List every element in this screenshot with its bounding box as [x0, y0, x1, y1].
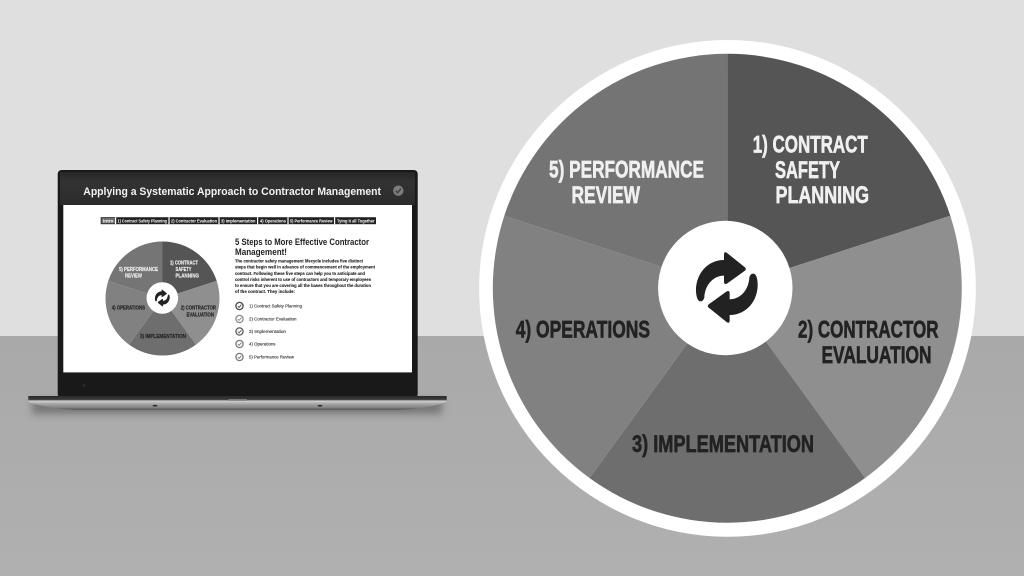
slide paragraph: of the contract. They include: [235, 289, 295, 295]
slide title bar [60, 172, 415, 205]
mini segment 5 [108, 242, 162, 298]
slide heading: Management! [235, 247, 287, 257]
mini segment 2 [162, 281, 219, 345]
laptop shadow [32, 400, 442, 414]
navigation tabs: Intro [103, 218, 114, 223]
mini segment 1 [162, 242, 217, 298]
laptop base [28, 396, 447, 410]
navigation tabs: 1) Contract Safety Planning [118, 218, 167, 223]
background wall [0, 0, 1024, 337]
label 5: 5) PERFORMANCE [549, 157, 704, 184]
slide title: Applying a Systematic Approach to Contractor Management [83, 186, 381, 198]
slide heading: 5 Steps to More Effective Contractor [235, 237, 369, 247]
mini label 2: EVALUATION [186, 312, 214, 318]
label 1: PLANNING [776, 182, 869, 209]
slide paragraph: The contractor safety management lifecycle includes five distinct [235, 258, 363, 264]
label 5: REVIEW [572, 182, 640, 209]
navigation tabs: 5) Performance Review [290, 218, 333, 223]
laptop camera [83, 384, 85, 387]
mini label 1: 1) CONTRACT [170, 260, 198, 266]
slide paragraph: contract. Following these five steps can help you to anticipate and [235, 271, 365, 277]
navigation tabs: 4) Operations [260, 218, 287, 223]
label 2: 2) CONTRACTOR [798, 317, 938, 344]
mini wheel chart [106, 242, 219, 355]
navigation tabs: Tying it all Together [337, 218, 375, 223]
mini label 5: 5) PERFORMANCE [119, 267, 158, 273]
icon: check badge [393, 186, 403, 196]
segment 3: implementation [590, 288, 865, 523]
list item 5: 5) Performance Review [249, 355, 294, 361]
segment 1: contract safety planning [727, 54, 950, 288]
icon: refresh arrows [696, 252, 758, 323]
main wheel chart [479, 40, 976, 537]
segment 5: performance review [504, 54, 727, 288]
slide paragraph: to ensure that you are covering all the bases throughout the duration [235, 283, 371, 289]
slide paragraph: steps that begin well in advance of commencement of the employment [235, 265, 375, 271]
mini label 2: 2) CONTRACTOR [181, 306, 216, 312]
label 3: 3) IMPLEMENTATION [632, 431, 814, 458]
navigation tabs: 3) Implementation [221, 218, 256, 223]
slide paragraph: control risks inherent to use of contractors and temporary employees [235, 277, 371, 283]
mini label 5: REVIEW [125, 274, 143, 280]
mini label 3: 3) IMPLEMENTATION [140, 334, 186, 340]
label 1: SAFETY [775, 157, 840, 184]
mini label 1: SAFETY [176, 267, 192, 273]
icon: mini refresh arrows [155, 290, 170, 306]
checklist [236, 302, 302, 361]
segment 4: operations [493, 216, 727, 478]
label 2: EVALUATION [822, 342, 932, 369]
list item 3: 3) Implementation [249, 329, 286, 335]
mini label 4: 4) OPERATIONS [112, 306, 145, 312]
list item 1: 1) Contract Safety Planning [249, 304, 302, 310]
segment 2: contractor evaluation [727, 216, 962, 478]
navigation tabs: 2) Contractor Evaluation [171, 218, 217, 223]
mini segment 4 [106, 281, 162, 345]
wheel hub [658, 221, 792, 355]
laptop bezel [58, 170, 418, 398]
mini hub [146, 282, 178, 314]
laptop mockup [28, 170, 447, 410]
list item 2: 2) Contractor Evaluation [249, 317, 297, 323]
wheel white rim [479, 40, 976, 537]
background floor [0, 336, 1024, 576]
mini label 1: PLANNING [176, 274, 199, 280]
list item 4: 4) Operations [249, 342, 276, 348]
label 1: 1) CONTRACT [753, 131, 868, 158]
navigation tabs [101, 217, 376, 224]
slide content panel [63, 205, 412, 372]
mini segment 3 [129, 298, 196, 355]
label 4: 4) OPERATIONS [516, 317, 650, 344]
